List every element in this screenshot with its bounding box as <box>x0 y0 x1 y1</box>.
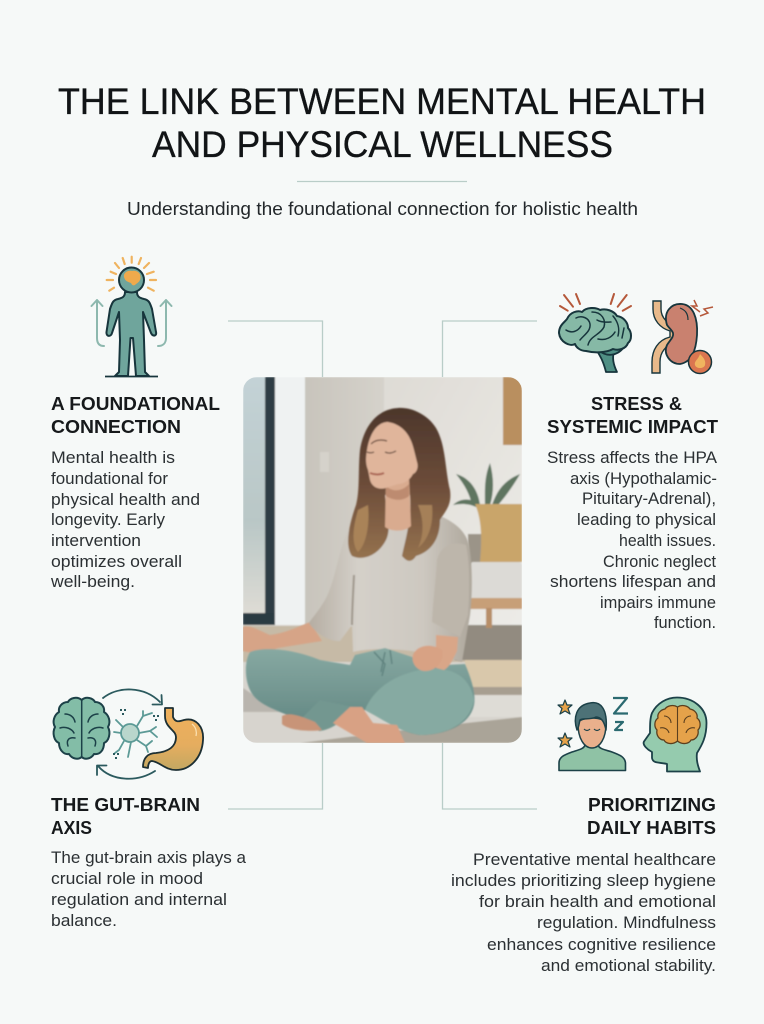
body text: physical health and <box>51 491 200 509</box>
right forearm and hand <box>436 635 458 670</box>
heading: CONNECTION <box>51 416 181 437</box>
body text: impairs immune <box>600 594 716 612</box>
left forearm and hand <box>243 622 322 652</box>
body text: includes prioritizing sleep hygiene <box>451 872 716 890</box>
icon: stressed brain and kidney <box>559 294 713 374</box>
panel: prioritizing daily habits <box>451 698 716 975</box>
body text: health issues. <box>619 532 716 550</box>
body text: balance. <box>51 912 117 930</box>
body text <box>50 449 200 591</box>
body text: Chronic neglect <box>603 553 716 571</box>
heading: AXIS <box>51 817 92 838</box>
body text: and emotional stability. <box>541 957 716 975</box>
icon: brain, neuron and stomach cycle <box>54 689 203 779</box>
panel: a foundational connection <box>50 257 220 591</box>
body text <box>451 851 716 975</box>
subtitle: Understanding the foundational connection for holistic health <box>127 199 638 219</box>
panel: gut-brain axis <box>51 689 247 930</box>
icon: person with glowing brain and upward arrows <box>92 257 172 376</box>
body text: optimizes overall <box>51 553 182 571</box>
heading: DAILY HABITS <box>587 817 716 838</box>
heading <box>51 393 220 437</box>
body text: longevity. Early <box>51 511 166 529</box>
body text: intervention <box>51 532 141 550</box>
heading: THE GUT-BRAIN <box>51 794 200 815</box>
body text: crucial role in mood <box>51 870 203 888</box>
title <box>58 81 706 165</box>
photo: woman meditating <box>243 377 522 743</box>
heading: SYSTEMIC IMPACT <box>547 416 719 437</box>
body text: shortens lifespan and <box>550 573 716 591</box>
connector: bottom right <box>442 743 537 809</box>
sweater <box>309 514 472 662</box>
body text: function. <box>654 614 716 632</box>
heading <box>51 794 200 838</box>
face <box>366 422 418 489</box>
body text: The gut-brain axis plays a <box>51 849 247 867</box>
body text <box>51 849 247 930</box>
heading: STRESS & <box>591 393 682 414</box>
connector: top right <box>442 321 537 377</box>
hair <box>348 408 450 561</box>
body text: regulation and internal <box>51 891 227 909</box>
connector: top left <box>228 321 322 377</box>
body text: leading to physical <box>577 511 716 529</box>
title: THE LINK BETWEEN MENTAL HEALTH <box>58 81 706 122</box>
panel: stress and systemic impact <box>547 294 719 632</box>
heading <box>587 794 716 838</box>
neck <box>385 476 411 531</box>
heading: A FOUNDATIONAL <box>51 393 220 414</box>
body text: Mental health is <box>51 449 175 467</box>
body text: axis (Hypothalamic- <box>570 470 717 488</box>
body text: for brain health and emotional <box>479 893 716 911</box>
heading <box>547 393 719 437</box>
feet <box>282 714 322 731</box>
body text: well-being. <box>50 573 135 591</box>
body text: Stress affects the HPA <box>547 449 717 467</box>
body text: foundational for <box>51 470 169 488</box>
body text: regulation. Mindfulness <box>537 914 716 932</box>
pants <box>246 648 475 735</box>
body text: Preventative mental healthcare <box>473 851 716 869</box>
connector: bottom left <box>228 743 322 809</box>
body text <box>547 449 717 632</box>
heading: PRIORITIZING <box>588 794 716 815</box>
body text: Pituitary-Adrenal), <box>582 490 716 508</box>
body text: enhances cognitive resilience <box>487 936 716 954</box>
title: AND PHYSICAL WELLNESS <box>152 124 613 165</box>
icon: sleeping person and head with brain <box>558 698 706 772</box>
